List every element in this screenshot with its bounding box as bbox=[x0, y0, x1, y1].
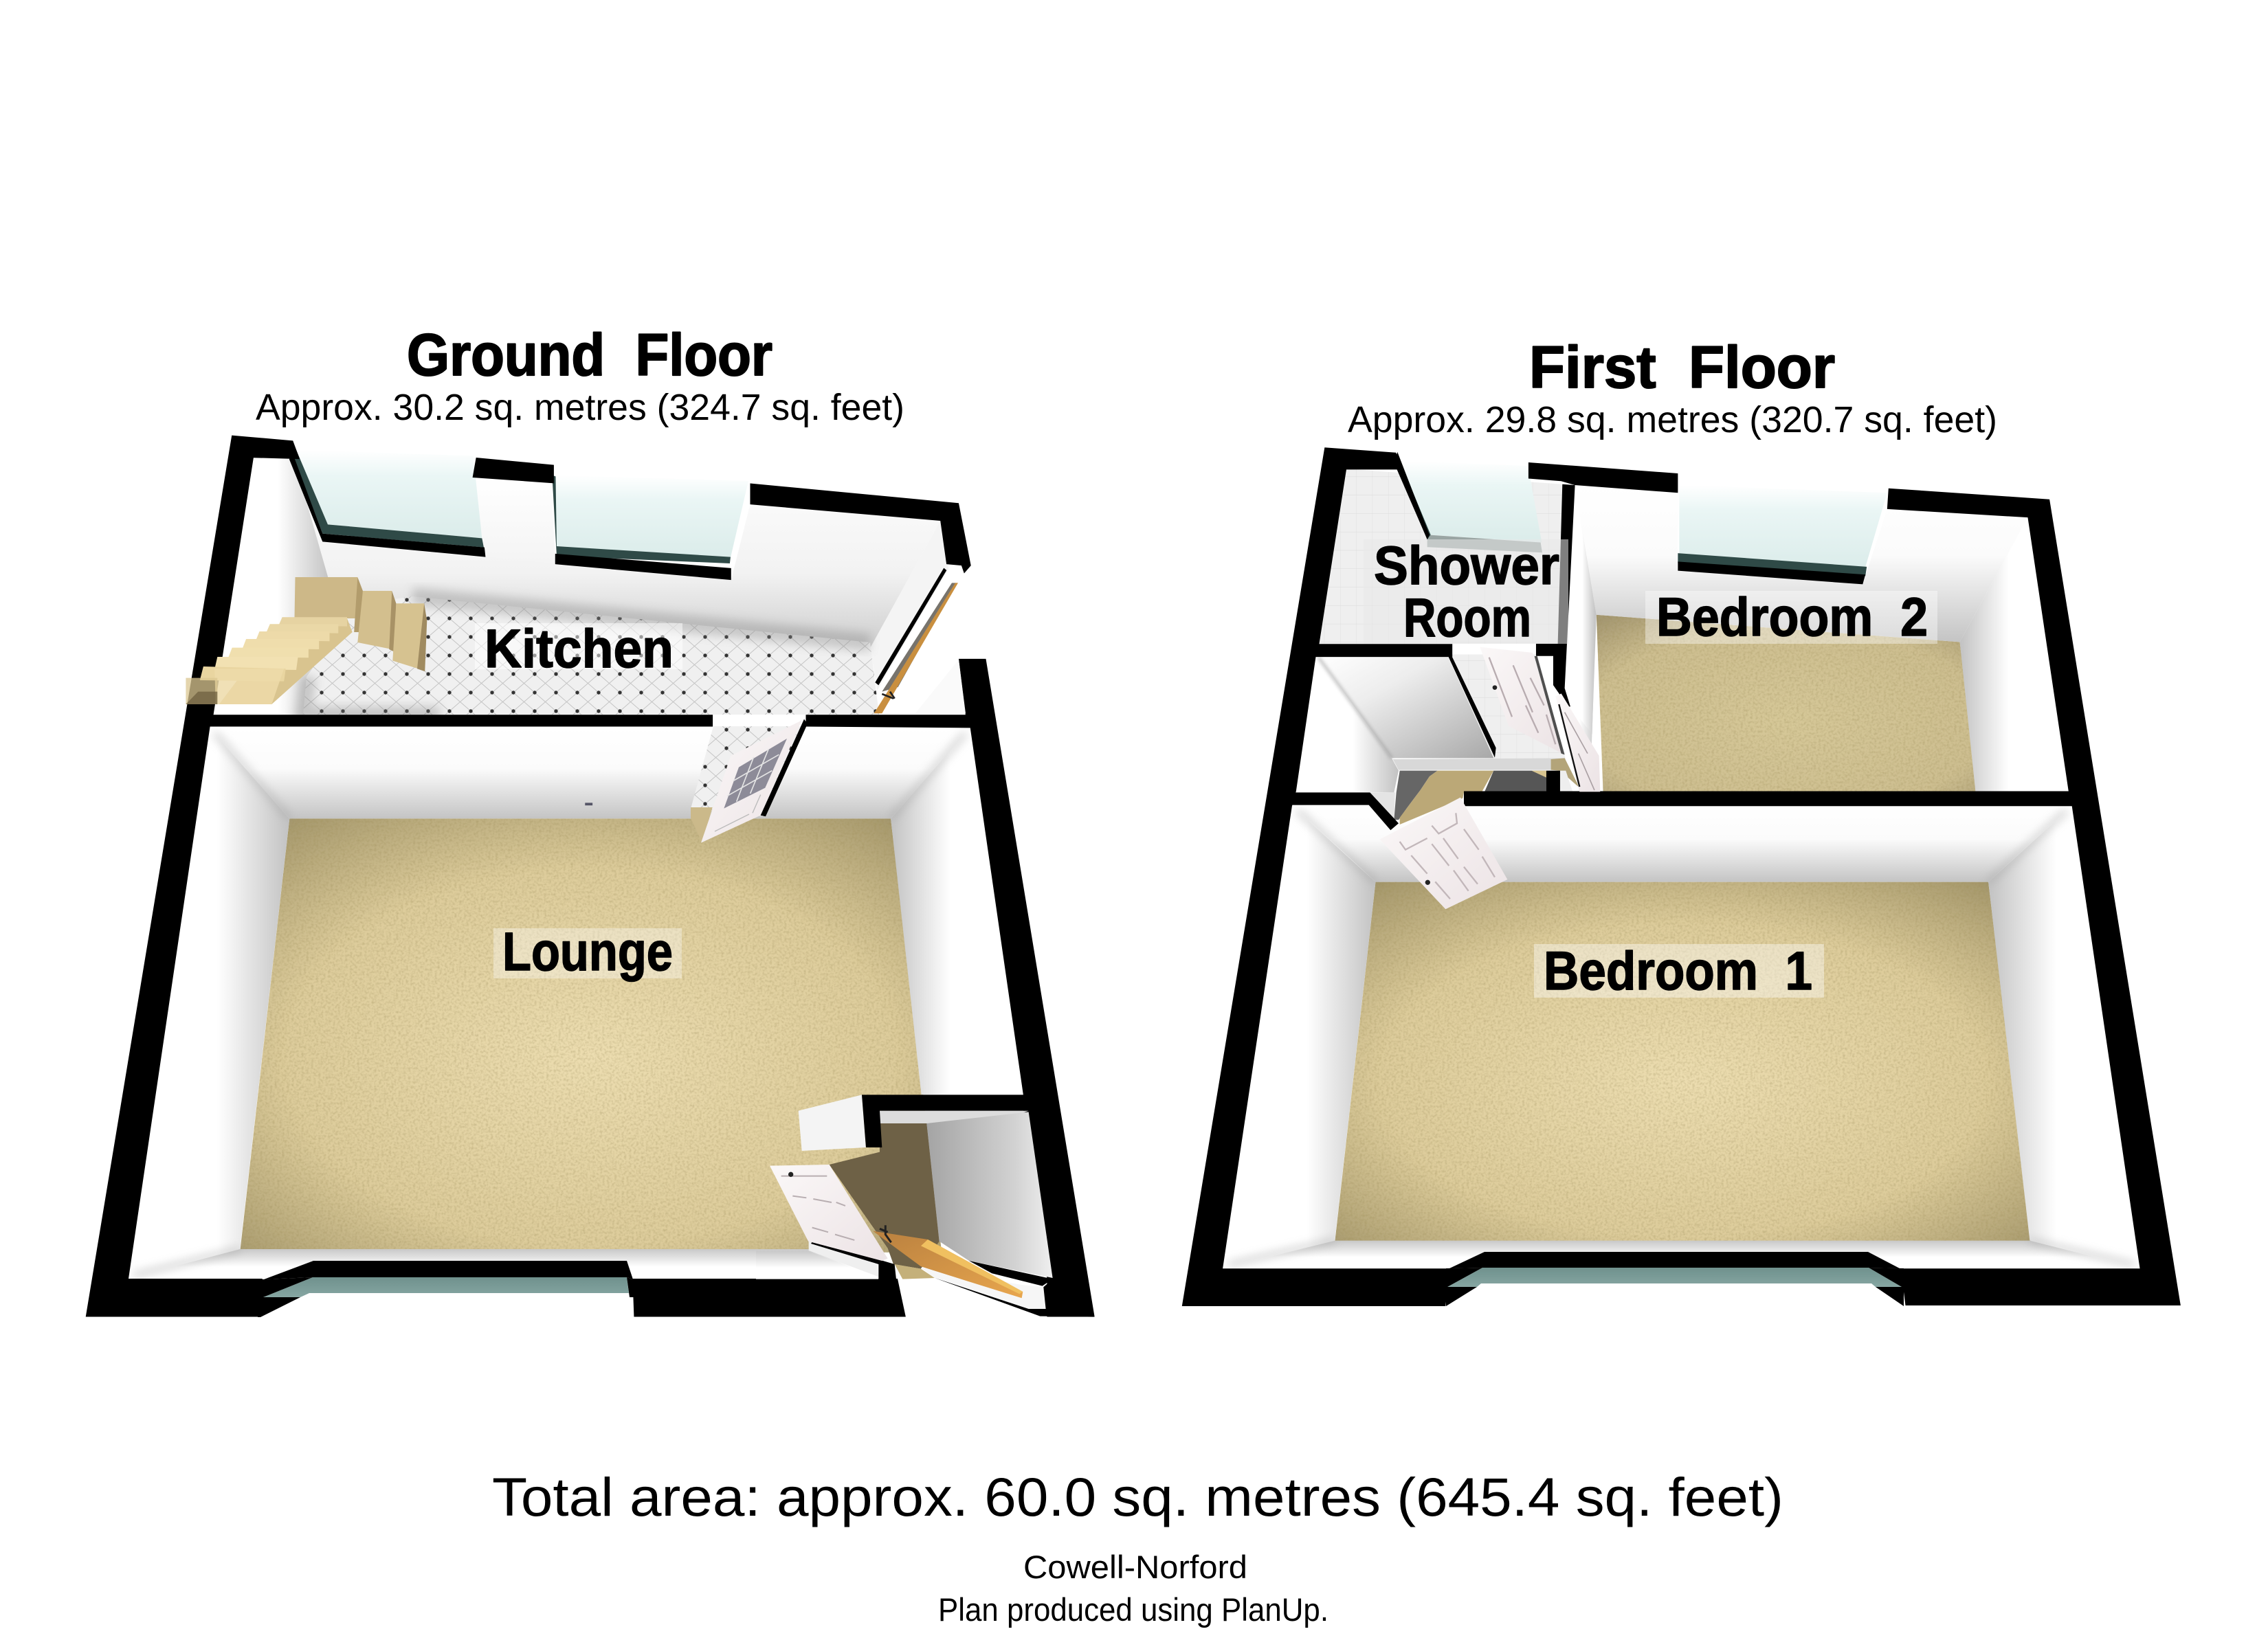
ground floor kitchen room walls bbox=[214, 457, 948, 715]
kitchen staircase bbox=[186, 577, 427, 704]
total area text: Total area: approx. 60.0 sq. metres (645.4 sq. feet) bbox=[492, 1466, 1783, 1527]
heading: ground floor bbox=[256, 322, 904, 428]
room label: shower room bbox=[1364, 535, 1568, 648]
panel: ground floor plan bbox=[86, 436, 1095, 1317]
bedroom 2 room bbox=[1559, 485, 2069, 793]
landing walls bbox=[1292, 655, 1560, 830]
ground floor black walls bbox=[86, 436, 1095, 1316]
heading: first floor bbox=[1348, 335, 1997, 440]
kitchen side door bbox=[874, 568, 966, 713]
credit: agent name: Cowell-Norford bbox=[1023, 1549, 1247, 1585]
bedroom 1 front window bbox=[1446, 1252, 1904, 1306]
kitchen tiled floor bbox=[303, 596, 879, 715]
kitchen to lounge door bbox=[691, 719, 808, 843]
room label: bedroom 2: Bedroom 2 bbox=[1656, 586, 1928, 647]
credit: plan software: Plan produced using PlanUp. bbox=[938, 1591, 1328, 1628]
shower room bbox=[1318, 460, 1596, 760]
panel: first floor plan bbox=[1182, 447, 2181, 1306]
title text: Ground Floor bbox=[407, 322, 772, 388]
doorway tile floor bbox=[691, 726, 804, 816]
room label: lounge: Lounge bbox=[502, 921, 673, 982]
room label: shower room: Room bbox=[1403, 587, 1531, 648]
room label: kitchen: Kitchen bbox=[485, 618, 674, 679]
lounge front window bbox=[258, 1261, 634, 1317]
area text: Approx. 29.8 sq. metres (320.7 sq. feet) bbox=[1348, 399, 1997, 440]
bedroom 1 door bbox=[1380, 798, 1507, 909]
bedroom 2 door bbox=[1555, 693, 1600, 792]
bedroom 1 room bbox=[1223, 804, 2140, 1268]
first floor black walls bbox=[1182, 447, 2181, 1306]
shower room door bbox=[1480, 647, 1565, 754]
first floor rear window frame and dividing walls bbox=[1394, 452, 1575, 706]
landing cupboard and stairwell bbox=[1297, 656, 1579, 824]
first floor doors bbox=[1380, 647, 1600, 909]
area text: Approx. 30.2 sq. metres (324.7 sq. feet) bbox=[256, 387, 904, 428]
room label: bedroom 1: Bedroom 1 bbox=[1544, 940, 1812, 1001]
title text: First Floor bbox=[1529, 335, 1835, 401]
understairs cupboard and front door bbox=[756, 1095, 1094, 1317]
kitchen windows bbox=[289, 450, 748, 563]
ground floor lounge room bbox=[129, 728, 1023, 1279]
room label: shower room: Shower bbox=[1374, 535, 1559, 596]
